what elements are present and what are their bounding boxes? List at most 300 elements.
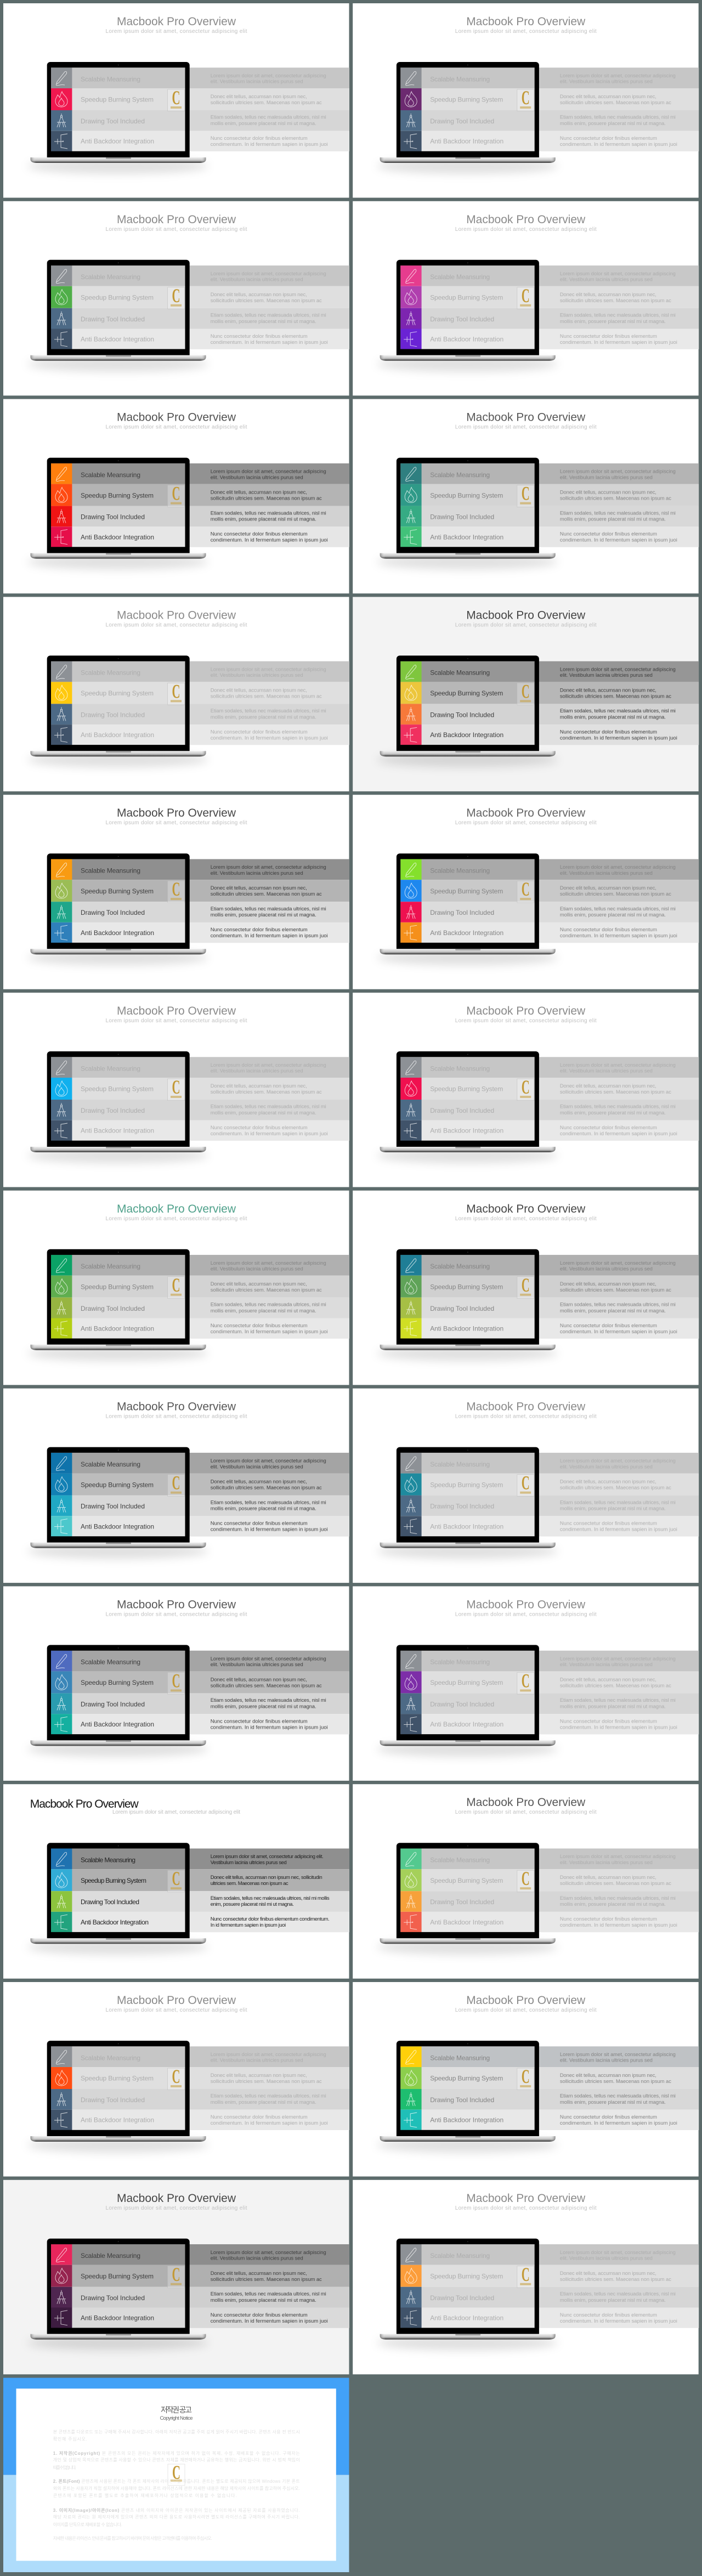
panel: slide 11 bbox=[3, 993, 349, 1187]
row: Scalable Meansuring: Scalable Meansuring bbox=[430, 1658, 490, 1666]
laptop bbox=[377, 458, 558, 570]
logo watermark: C bbox=[522, 87, 530, 109]
logo watermark: C bbox=[172, 1076, 180, 1098]
subtitle: Lorem ipsum dolor sit amet, consectetur adipiscing elit bbox=[105, 2205, 247, 2211]
row: Speedup Burning System: Donec elit tellus, accumsan non ipsum nec, bbox=[560, 1676, 656, 1682]
row: Speedup Burning System: sollicitudin ultricies sem. Maecenas non ipsum ac bbox=[560, 693, 671, 699]
row: Scalable Meansuring bbox=[400, 265, 699, 286]
row: Drawing Tool Included bbox=[400, 1298, 699, 1318]
row: Scalable Meansuring: elit. Vestibulum lacinia ultricies purus sed bbox=[560, 1266, 653, 1272]
row: Scalable Meansuring: Scalable Meansuring bbox=[430, 867, 490, 874]
row: Drawing Tool Included: Drawing Tool Included bbox=[81, 1305, 145, 1312]
row: Anti Backdoor Integration: Anti Backdoor Integration bbox=[430, 1720, 503, 1728]
logo watermark: C bbox=[522, 1867, 530, 1889]
copyright subheading: Copyright Notice bbox=[160, 2415, 193, 2421]
row: Drawing Tool Included: Drawing Tool Included bbox=[430, 117, 494, 125]
row: Speedup Burning System bbox=[51, 1078, 349, 1100]
laptop bbox=[27, 458, 208, 570]
row: Anti Backdoor Integration: Anti Backdoor Integration bbox=[430, 335, 503, 343]
title: Macbook Pro Overview bbox=[466, 1005, 586, 1017]
title: Macbook Pro Overview bbox=[466, 15, 586, 28]
row: Drawing Tool Included: mollis enim, posuere placerat nisl mi ut magna. bbox=[211, 1109, 316, 1116]
row: Speedup Burning System bbox=[400, 1474, 699, 1496]
panel: slide 22 bbox=[353, 1982, 699, 2176]
title: Macbook Pro Overview bbox=[466, 2192, 586, 2205]
row: Speedup Burning System: Speedup Burning System bbox=[430, 2273, 503, 2280]
panel: slide 19 bbox=[3, 1784, 349, 1979]
title: Macbook Pro Overview bbox=[117, 807, 236, 819]
panel: slide 17 bbox=[3, 1586, 349, 1781]
row: Scalable Meansuring: Lorem ipsum dolor sit amet, consectetur adipiscing bbox=[211, 864, 326, 870]
copyright body text bbox=[53, 2429, 300, 2541]
row: Anti Backdoor Integration bbox=[400, 329, 699, 349]
subtitle: Lorem ipsum dolor sit amet, consectetur adipiscing elit bbox=[455, 1809, 597, 1815]
copyright body text: 1. 저작권(Copyright) 본 콘텐츠의 모든 권리는 제작자에게 있으며 허가 없이 복제, 수정, 재배포할 수 없습니다. 구매자는 bbox=[53, 2450, 300, 2456]
row: Drawing Tool Included: Drawing Tool Included bbox=[81, 909, 145, 916]
row: Drawing Tool Included: Etiam sodales, tellus nec malesuada ultrices, nisl mi bbox=[211, 1697, 326, 1703]
row: Anti Backdoor Integration: Anti Backdoor Integration bbox=[81, 731, 154, 739]
row: Drawing Tool Included bbox=[51, 1298, 349, 1318]
row: Speedup Burning System: sollicitudin ultricies sem. Maecenas non ipsum ac bbox=[211, 1089, 322, 1095]
row: Drawing Tool Included bbox=[400, 1891, 699, 1912]
row: Scalable Meansuring: Lorem ipsum dolor sit amet, consectetur adipiscing bbox=[560, 2051, 676, 2057]
row: Scalable Meansuring: elit. Vestibulum lacinia ultricies purus sed bbox=[560, 2057, 653, 2063]
laptop bbox=[27, 1645, 208, 1757]
row: Speedup Burning System: sollicitudin ultricies sem. Maecenas non ipsum ac bbox=[211, 1485, 322, 1491]
panel: slide 12 bbox=[353, 993, 699, 1187]
logo watermark: C bbox=[172, 2263, 180, 2285]
row: Drawing Tool Included: Etiam sodales, tellus nec malesuada ultrices, nisl mi bbox=[560, 905, 676, 911]
row: Speedup Burning System: sollicitudin ultricies sem. Maecenas non ipsum ac bbox=[560, 2276, 671, 2282]
title: Macbook Pro Overview bbox=[117, 213, 236, 226]
row: Anti Backdoor Integration: Nunc consectetur dolor finibus elementum bbox=[560, 1322, 657, 1328]
row: Speedup Burning System bbox=[51, 2067, 349, 2089]
row: Scalable Meansuring: Lorem ipsum dolor sit amet, consectetur adipiscing bbox=[211, 468, 326, 474]
row: Drawing Tool Included: mollis enim, posuere placerat nisl mi ut magna. bbox=[211, 2099, 316, 2105]
logo watermark bbox=[168, 87, 185, 111]
row: Scalable Meansuring: Scalable Meansuring bbox=[81, 75, 140, 83]
row: Anti Backdoor Integration bbox=[51, 526, 349, 547]
row: Scalable Meansuring bbox=[51, 67, 349, 88]
row: Speedup Burning System: Speedup Burning System bbox=[81, 1679, 154, 1686]
row: Anti Backdoor Integration: condimentum. In id fermentum sapien in ipsum juoi bbox=[211, 2318, 328, 2324]
row: Speedup Burning System: sollicitudin ultricies sem. Maecenas non ipsum ac bbox=[560, 891, 671, 897]
row: Speedup Burning System: ultricies sem. Maecenas non ipsum ac bbox=[211, 1880, 288, 1886]
row: Scalable Meansuring: Lorem ipsum dolor sit amet, consectetur adipiscing bbox=[211, 666, 326, 672]
row: Drawing Tool Included: mollis enim, posuere placerat nisl mi ut magna. bbox=[211, 714, 316, 720]
row: Scalable Meansuring: Scalable Meansuring bbox=[430, 273, 490, 281]
laptop bbox=[377, 260, 558, 372]
row: Speedup Burning System: Speedup Burning System bbox=[81, 2273, 154, 2280]
row: Anti Backdoor Integration: Anti Backdoor Integration bbox=[81, 138, 154, 145]
logo watermark bbox=[517, 1472, 534, 1496]
row: Scalable Meansuring: Scalable Meansuring bbox=[430, 1262, 490, 1270]
row: Scalable Meansuring: Lorem ipsum dolor sit amet, consectetur adipiscing bbox=[560, 1062, 676, 1068]
row: Anti Backdoor Integration: condimentum. In id fermentum sapien in ipsum juoi bbox=[211, 734, 328, 740]
title: Macbook Pro Overview bbox=[117, 1598, 236, 1611]
row: Speedup Burning System bbox=[51, 1276, 349, 1298]
row: Scalable Meansuring: Scalable Meansuring bbox=[81, 1262, 140, 1270]
row: Anti Backdoor Integration: Nunc consectetur dolor finibus elementum bbox=[560, 728, 657, 734]
title: Macbook Pro Overview bbox=[466, 213, 586, 226]
row: Anti Backdoor Integration bbox=[51, 2308, 349, 2328]
subtitle: Lorem ipsum dolor sit amet, consectetur adipiscing elit bbox=[105, 1018, 247, 1024]
logo watermark: C bbox=[522, 1472, 530, 1494]
row: Scalable Meansuring: Lorem ipsum dolor sit amet, consectetur adipiscing bbox=[211, 2249, 326, 2255]
subtitle: Lorem ipsum dolor sit amet, consectetur adipiscing elit bbox=[105, 2007, 247, 2013]
row: Drawing Tool Included: enim, posuere placerat nisl mi ut magna. bbox=[211, 1901, 294, 1907]
row: Anti Backdoor Integration: Nunc consectetur dolor finibus elementum bbox=[560, 1916, 657, 1922]
laptop bbox=[377, 655, 558, 767]
logo watermark: C bbox=[522, 285, 530, 307]
row: Anti Backdoor Integration: condimentum. In id fermentum sapien in ipsum juoi bbox=[560, 1724, 677, 1730]
row: Drawing Tool Included: mollis enim, posuere placerat nisl mi ut magna. bbox=[560, 911, 666, 918]
row: Drawing Tool Included: Drawing Tool Included bbox=[430, 1898, 494, 1906]
logo watermark bbox=[168, 2065, 185, 2090]
row: Scalable Meansuring: elit. Vestibulum lacinia ultricies purus sed bbox=[211, 1068, 303, 1074]
row: Drawing Tool Included: Etiam sodales, tellus nec malesuada ultrices, nisl mi bbox=[560, 312, 676, 318]
laptop bbox=[27, 260, 208, 372]
row: Scalable Meansuring: Lorem ipsum dolor sit amet, consectetur adipiscing bbox=[211, 1260, 326, 1266]
row: Anti Backdoor Integration: Nunc consectetur dolor finibus elementum bbox=[211, 926, 308, 932]
row: Anti Backdoor Integration: Anti Backdoor Integration bbox=[81, 1325, 154, 1333]
row: Anti Backdoor Integration: Nunc consectetur dolor finibus elementum condimentum. bbox=[211, 1916, 330, 1922]
row: Anti Backdoor Integration: Anti Backdoor Integration bbox=[81, 1720, 154, 1728]
copyright body text: 따를 수 있습니다. bbox=[53, 2465, 76, 2470]
row: Speedup Burning System bbox=[400, 1671, 699, 1693]
row: Drawing Tool Included: mollis enim, posuere placerat nisl mi ut magna. bbox=[560, 318, 666, 324]
row: Drawing Tool Included bbox=[51, 1496, 349, 1516]
subtitle: Lorem ipsum dolor sit amet, consectetur adipiscing elit bbox=[105, 227, 247, 233]
row: Drawing Tool Included: Drawing Tool Included bbox=[430, 1107, 494, 1114]
logo watermark bbox=[517, 483, 534, 507]
row: Drawing Tool Included: Etiam sodales, tellus nec malesuada ultrices, nisl mi bbox=[211, 509, 326, 516]
row: Drawing Tool Included: Etiam sodales, tellus nec malesuada ultrices, nisl mi mollis bbox=[211, 1895, 330, 1901]
row: Speedup Burning System: sollicitudin ultricies sem. Maecenas non ipsum ac bbox=[560, 1880, 671, 1886]
panel: slide 9 bbox=[3, 795, 349, 989]
row: Speedup Burning System: Speedup Burning System bbox=[430, 491, 503, 499]
row: Drawing Tool Included: mollis enim, posuere placerat nisl mi ut magna. bbox=[211, 2297, 316, 2303]
logo watermark: C bbox=[172, 878, 180, 900]
row: Anti Backdoor Integration: Anti Backdoor Integration bbox=[81, 2314, 154, 2322]
row: Drawing Tool Included: Etiam sodales, tellus nec malesuada ultrices, nisl mi bbox=[211, 114, 326, 120]
row: Anti Backdoor Integration: condimentum. In id fermentum sapien in ipsum juoi bbox=[560, 2120, 677, 2126]
row: Speedup Burning System: sollicitudin ultricies sem. Maecenas non ipsum ac bbox=[211, 495, 322, 501]
row: Scalable Meansuring: elit. Vestibulum lacinia ultricies purus sed bbox=[560, 474, 653, 480]
row: Scalable Meansuring: Lorem ipsum dolor sit amet, consectetur adipiscing bbox=[560, 1853, 676, 1859]
row: Speedup Burning System: Speedup Burning System bbox=[81, 1085, 154, 1093]
row: Speedup Burning System: sollicitudin ultricies sem. Maecenas non ipsum ac bbox=[211, 297, 322, 303]
subtitle: Lorem ipsum dolor sit amet, consectetur adipiscing elit bbox=[455, 1611, 597, 1617]
row: Anti Backdoor Integration bbox=[400, 922, 699, 943]
row: Scalable Meansuring: Lorem ipsum dolor sit amet, consectetur adipiscing bbox=[560, 1458, 676, 1464]
row: Speedup Burning System: Donec elit tellus, accumsan non ipsum nec, bbox=[560, 1874, 656, 1880]
row: Scalable Meansuring: elit. Vestibulum lacinia ultricies purus sed bbox=[211, 474, 303, 480]
row: Drawing Tool Included: mollis enim, posuere placerat nisl mi ut magna. bbox=[560, 516, 666, 522]
row: Speedup Burning System: Speedup Burning System bbox=[81, 96, 154, 104]
row: Scalable Meansuring bbox=[51, 463, 349, 484]
row: Drawing Tool Included: mollis enim, posuere placerat nisl mi ut magna. bbox=[211, 911, 316, 918]
laptop bbox=[27, 1447, 208, 1559]
row: Anti Backdoor Integration: condimentum. In id fermentum sapien in ipsum juoi bbox=[560, 1130, 677, 1136]
row: Drawing Tool Included: mollis enim, posuere placerat nisl mi ut magna. bbox=[560, 2297, 666, 2303]
row: Speedup Burning System: Speedup Burning System bbox=[81, 491, 154, 499]
subtitle: Lorem ipsum dolor sit amet, consectetur adipiscing elit bbox=[455, 1216, 597, 1222]
row: Anti Backdoor Integration bbox=[51, 1516, 349, 1537]
logo watermark: C bbox=[172, 1274, 180, 1296]
row: Anti Backdoor Integration: Anti Backdoor Integration bbox=[430, 2116, 503, 2124]
title: Macbook Pro Overview bbox=[466, 1401, 586, 1413]
row: Drawing Tool Included: Drawing Tool Included bbox=[81, 1898, 139, 1906]
row: Drawing Tool Included bbox=[400, 110, 699, 131]
logo watermark bbox=[168, 1472, 185, 1496]
row: Drawing Tool Included: Drawing Tool Included bbox=[81, 513, 145, 521]
laptop bbox=[377, 1843, 558, 1955]
panel: slide 16 bbox=[353, 1389, 699, 1583]
subtitle: Lorem ipsum dolor sit amet, consectetur adipiscing elit bbox=[105, 1216, 247, 1222]
row: Speedup Burning System bbox=[51, 1869, 349, 1891]
row: Scalable Meansuring: Scalable Meansuring bbox=[81, 273, 140, 281]
row: Speedup Burning System: Donec elit tellus, accumsan non ipsum nec, bbox=[211, 93, 307, 99]
row: Speedup Burning System: Speedup Burning System bbox=[430, 689, 503, 697]
row: Speedup Burning System: Donec elit tellus, accumsan non ipsum nec, bbox=[560, 1281, 656, 1287]
row: Drawing Tool Included: mollis enim, posuere placerat nisl mi ut magna. bbox=[211, 516, 316, 522]
subtitle: Lorem ipsum dolor sit amet, consectetur adipiscing elit bbox=[105, 622, 247, 628]
row: Drawing Tool Included bbox=[400, 1100, 699, 1120]
row: Anti Backdoor Integration: Anti Backdoor Integration bbox=[81, 2116, 154, 2124]
row: Drawing Tool Included: Etiam sodales, tellus nec malesuada ultrices, nisl mi bbox=[211, 905, 326, 911]
row: Scalable Meansuring: Scalable Meansuring bbox=[81, 669, 140, 677]
row: Anti Backdoor Integration: Nunc consectetur dolor finibus elementum bbox=[560, 1124, 657, 1130]
row: Anti Backdoor Integration: Nunc consectetur dolor finibus elementum bbox=[560, 1520, 657, 1526]
row: Anti Backdoor Integration: condimentum. In id fermentum sapien in ipsum juoi bbox=[211, 932, 328, 938]
logo watermark: C bbox=[522, 878, 530, 900]
row: Scalable Meansuring: elit. Vestibulum lacinia ultricies purus sed bbox=[560, 1463, 653, 1469]
row: Speedup Burning System: Speedup Burning System bbox=[430, 2075, 503, 2082]
row: Speedup Burning System bbox=[51, 286, 349, 308]
row: Speedup Burning System: sollicitudin ultricies sem. Maecenas non ipsum ac bbox=[560, 99, 671, 105]
copyright heading: 저작권 공고 bbox=[161, 2405, 192, 2414]
row: Speedup Burning System: Speedup Burning System bbox=[430, 887, 503, 895]
panel: slide 24 bbox=[353, 2180, 699, 2374]
row: Scalable Meansuring: Lorem ipsum dolor sit amet, consectetur adipiscing bbox=[560, 72, 676, 78]
laptop bbox=[377, 1447, 558, 1559]
row: Anti Backdoor Integration: Anti Backdoor Integration bbox=[81, 1522, 154, 1530]
row: Anti Backdoor Integration bbox=[51, 329, 349, 349]
row: Anti Backdoor Integration bbox=[51, 1318, 349, 1339]
row: Anti Backdoor Integration: Nunc consectetur dolor finibus elementum bbox=[560, 333, 657, 339]
row: Scalable Meansuring bbox=[400, 2244, 699, 2265]
copyright body text: 개인 및 상업적 목적으로 콘텐츠를 사용할 수 있으나 콘텐츠 자체를 재판매하거나 공유하는 행위는 금지됩니다. 위반 시 법적 책임이 bbox=[53, 2457, 300, 2462]
row: Speedup Burning System: Donec elit tellus, accumsan non ipsum nec, bbox=[211, 1281, 307, 1287]
laptop bbox=[27, 1843, 208, 1955]
row: Anti Backdoor Integration: Anti Backdoor Integration bbox=[81, 929, 154, 937]
row: Drawing Tool Included bbox=[51, 1100, 349, 1120]
row: Drawing Tool Included: Etiam sodales, tellus nec malesuada ultrices, nisl mi bbox=[211, 2093, 326, 2099]
subtitle: Lorem ipsum dolor sit amet, consectetur adipiscing elit bbox=[455, 227, 597, 233]
row: Scalable Meansuring: Scalable Meansuring bbox=[430, 75, 490, 83]
row: Anti Backdoor Integration: Anti Backdoor Integration bbox=[430, 2314, 503, 2322]
logo watermark bbox=[517, 878, 534, 903]
row: Drawing Tool Included bbox=[51, 902, 349, 922]
row: Drawing Tool Included bbox=[51, 308, 349, 329]
row: Scalable Meansuring: elit. Vestibulum lacinia ultricies purus sed bbox=[560, 870, 653, 876]
row: Anti Backdoor Integration: Nunc consectetur dolor finibus elementum bbox=[560, 926, 657, 932]
panel: slide 23 bbox=[3, 2180, 349, 2374]
row: Speedup Burning System: Donec elit tellus, accumsan non ipsum nec, bbox=[560, 2072, 656, 2078]
laptop bbox=[27, 1249, 208, 1361]
row: Drawing Tool Included: Drawing Tool Included bbox=[81, 315, 145, 323]
row: Scalable Meansuring: elit. Vestibulum lacinia ultricies purus sed bbox=[560, 2255, 653, 2261]
row: Scalable Meansuring: elit. Vestibulum lacinia ultricies purus sed bbox=[211, 1266, 303, 1272]
row: Anti Backdoor Integration: Nunc consectetur dolor finibus elementum bbox=[560, 2114, 657, 2120]
row: Anti Backdoor Integration bbox=[400, 1912, 699, 1932]
row: Drawing Tool Included: Etiam sodales, tellus nec malesuada ultrices, nisl mi bbox=[560, 2291, 676, 2297]
row: Scalable Meansuring: Scalable Meansuring bbox=[81, 2054, 140, 2062]
row: Scalable Meansuring bbox=[400, 1848, 699, 1869]
row: Speedup Burning System: Speedup Burning System bbox=[430, 1085, 503, 1093]
panel: slide 7 bbox=[3, 597, 349, 791]
title: Macbook Pro Overview bbox=[30, 1798, 139, 1810]
row: Scalable Meansuring bbox=[51, 265, 349, 286]
row: Speedup Burning System: sollicitudin ultricies sem. Maecenas non ipsum ac bbox=[560, 2078, 671, 2084]
row: Drawing Tool Included bbox=[51, 1891, 349, 1912]
subtitle: Lorem ipsum dolor sit amet, consectetur adipiscing elit bbox=[455, 2007, 597, 2013]
title: Macbook Pro Overview bbox=[117, 15, 236, 28]
title: Macbook Pro Overview bbox=[466, 1598, 586, 1611]
row: Scalable Meansuring bbox=[400, 661, 699, 682]
panel: slide 10 bbox=[353, 795, 699, 989]
row: Drawing Tool Included: mollis enim, posuere placerat nisl mi ut magna. bbox=[560, 1109, 666, 1116]
row: Anti Backdoor Integration: Nunc consectetur dolor finibus elementum bbox=[211, 1124, 308, 1130]
row: Anti Backdoor Integration: condimentum. In id fermentum sapien in ipsum juoi bbox=[560, 2318, 677, 2324]
panel: slide 15 bbox=[3, 1389, 349, 1583]
logo watermark bbox=[517, 2065, 534, 2090]
row: Anti Backdoor Integration bbox=[51, 1714, 349, 1734]
row: Speedup Burning System bbox=[51, 2265, 349, 2287]
panel: slide 13 bbox=[3, 1191, 349, 1385]
row: Scalable Meansuring: Scalable Meansuring bbox=[430, 2252, 490, 2260]
title: Macbook Pro Overview bbox=[117, 1994, 236, 2007]
panel: slide 18 bbox=[353, 1586, 699, 1781]
row: Scalable Meansuring bbox=[400, 463, 699, 484]
row: Scalable Meansuring: Scalable Meansuring bbox=[81, 1856, 135, 1864]
row: Anti Backdoor Integration bbox=[400, 2308, 699, 2328]
row: Scalable Meansuring: Scalable Meansuring bbox=[81, 1065, 140, 1072]
row: Drawing Tool Included: Etiam sodales, tellus nec malesuada ultrices, nisl mi bbox=[560, 1499, 676, 1505]
row: Drawing Tool Included bbox=[400, 2287, 699, 2308]
row: Scalable Meansuring: elit. Vestibulum lacinia ultricies purus sed bbox=[560, 1859, 653, 1865]
row: Speedup Burning System: Donec elit tellus, accumsan non ipsum nec, bbox=[211, 489, 307, 495]
subtitle: Lorem ipsum dolor sit amet, consectetur adipiscing elit bbox=[455, 424, 597, 431]
row: Scalable Meansuring: elit. Vestibulum lacinia ultricies purus sed bbox=[560, 276, 653, 282]
row: Scalable Meansuring: elit. Vestibulum lacinia ultricies purus sed bbox=[560, 1068, 653, 1074]
subtitle: Lorem ipsum dolor sit amet, consectetur adipiscing elit bbox=[455, 820, 597, 826]
row: Speedup Burning System: Speedup Burning System bbox=[81, 293, 154, 301]
row: Drawing Tool Included: Etiam sodales, tellus nec malesuada ultrices, nisl mi bbox=[211, 312, 326, 318]
row: Scalable Meansuring: Lorem ipsum dolor sit amet, consectetur adipiscing bbox=[560, 468, 676, 474]
copyright body text: 외의 폰트는 사용자가 직접 설치하여 사용해야 합니다. 폰트 라이선스에 관한 자세한 내용은 해당 제작사의 사이트를 참고하여 주십시오. bbox=[53, 2486, 300, 2491]
row: Speedup Burning System: Speedup Burning System bbox=[430, 1679, 503, 1686]
row: Speedup Burning System bbox=[51, 880, 349, 902]
logo watermark bbox=[517, 87, 534, 111]
row: Anti Backdoor Integration: Anti Backdoor Integration bbox=[81, 1127, 154, 1135]
row: Anti Backdoor Integration bbox=[400, 131, 699, 151]
logo watermark bbox=[517, 1867, 534, 1892]
row: Anti Backdoor Integration: condimentum. In id fermentum sapien in ipsum juoi bbox=[211, 339, 328, 345]
row: Speedup Burning System: Speedup Burning System bbox=[430, 1877, 503, 1884]
logo watermark: C bbox=[172, 1669, 180, 1691]
row: Anti Backdoor Integration: Anti Backdoor Integration bbox=[430, 1522, 503, 1530]
row: Scalable Meansuring: Lorem ipsum dolor sit amet, consectetur adipiscing bbox=[560, 1260, 676, 1266]
row: Drawing Tool Included bbox=[400, 506, 699, 526]
logo watermark: C bbox=[172, 87, 180, 109]
row: Speedup Burning System bbox=[400, 1276, 699, 1298]
logo watermark: C bbox=[522, 483, 530, 505]
row: Anti Backdoor Integration bbox=[51, 1120, 349, 1141]
logo watermark bbox=[517, 1076, 534, 1101]
row: Speedup Burning System: Speedup Burning System bbox=[81, 2075, 154, 2082]
row: Anti Backdoor Integration bbox=[400, 526, 699, 547]
row: Anti Backdoor Integration: condimentum. In id fermentum sapien in ipsum juoi bbox=[560, 339, 677, 345]
row: Speedup Burning System: Donec elit tellus, accumsan non ipsum nec, bbox=[211, 291, 307, 297]
row: Scalable Meansuring: Lorem ipsum dolor sit amet, consectetur adipiscing bbox=[211, 1458, 326, 1464]
row: Anti Backdoor Integration: Nunc consectetur dolor finibus elementum bbox=[560, 1718, 657, 1724]
row: Speedup Burning System bbox=[400, 2067, 699, 2089]
laptop bbox=[27, 853, 208, 965]
panel: slide 3 bbox=[3, 201, 349, 395]
row: Drawing Tool Included: mollis enim, posuere placerat nisl mi ut magna. bbox=[211, 1703, 316, 1709]
row: Speedup Burning System: Donec elit tellus, accumsan non ipsum nec, bbox=[560, 687, 656, 693]
row: Anti Backdoor Integration: condimentum. In id fermentum sapien in ipsum juoi bbox=[560, 537, 677, 543]
row: Speedup Burning System: Speedup Burning System bbox=[81, 1877, 146, 1884]
panel: copyright notice bbox=[3, 2378, 349, 2572]
panel: slide 8 bbox=[353, 597, 699, 791]
row: Drawing Tool Included: Drawing Tool Included bbox=[81, 117, 145, 125]
row: Speedup Burning System: Donec elit tellus, accumsan non ipsum nec, bbox=[211, 885, 307, 891]
row: Scalable Meansuring bbox=[51, 1848, 349, 1869]
logo watermark: C bbox=[522, 2065, 530, 2087]
row: Speedup Burning System: Speedup Burning System bbox=[430, 1283, 503, 1291]
row: Scalable Meansuring: Lorem ipsum dolor sit amet, consectetur adipiscing elit. bbox=[211, 1853, 324, 1859]
row: Speedup Burning System: sollicitudin ultricies sem. Maecenas non ipsum ac bbox=[560, 297, 671, 303]
row: Speedup Burning System: Donec elit tellus, accumsan non ipsum nec, bbox=[211, 2270, 307, 2276]
logo watermark bbox=[517, 2263, 534, 2288]
row: Drawing Tool Included bbox=[51, 2089, 349, 2110]
row: Speedup Burning System: sollicitudin ultricies sem. Maecenas non ipsum ac bbox=[560, 1682, 671, 1688]
row: Speedup Burning System bbox=[51, 88, 349, 110]
subtitle: Lorem ipsum dolor sit amet, consectetur adipiscing elit bbox=[455, 29, 597, 35]
row: Speedup Burning System bbox=[400, 484, 699, 506]
panel: slide 21 bbox=[3, 1982, 349, 2176]
row: Speedup Burning System: sollicitudin ultricies sem. Maecenas non ipsum ac bbox=[211, 891, 322, 897]
row: Scalable Meansuring: elit. Vestibulum lacinia ultricies purus sed bbox=[560, 1661, 653, 1667]
row: Speedup Burning System: sollicitudin ultricies sem. Maecenas non ipsum ac bbox=[211, 1287, 322, 1293]
row: Anti Backdoor Integration: condimentum. In id fermentum sapien in ipsum juoi bbox=[560, 1526, 677, 1532]
laptop bbox=[27, 1051, 208, 1163]
row: Speedup Burning System: Speedup Burning System bbox=[430, 96, 503, 104]
logo watermark bbox=[517, 680, 534, 705]
logo watermark bbox=[168, 1867, 185, 1892]
row: Drawing Tool Included: Drawing Tool Included bbox=[81, 1700, 145, 1708]
row: Anti Backdoor Integration bbox=[51, 131, 349, 151]
row: Speedup Burning System: Donec elit tellus, accumsan non ipsum nec, bbox=[560, 1479, 656, 1485]
subtitle: Lorem ipsum dolor sit amet, consectetur adipiscing elit bbox=[105, 29, 247, 35]
row: Anti Backdoor Integration bbox=[400, 1714, 699, 1734]
row: Speedup Burning System: sollicitudin ultricies sem. Maecenas non ipsum ac bbox=[211, 99, 322, 105]
row: Drawing Tool Included bbox=[400, 1496, 699, 1516]
row: Speedup Burning System bbox=[51, 1474, 349, 1496]
